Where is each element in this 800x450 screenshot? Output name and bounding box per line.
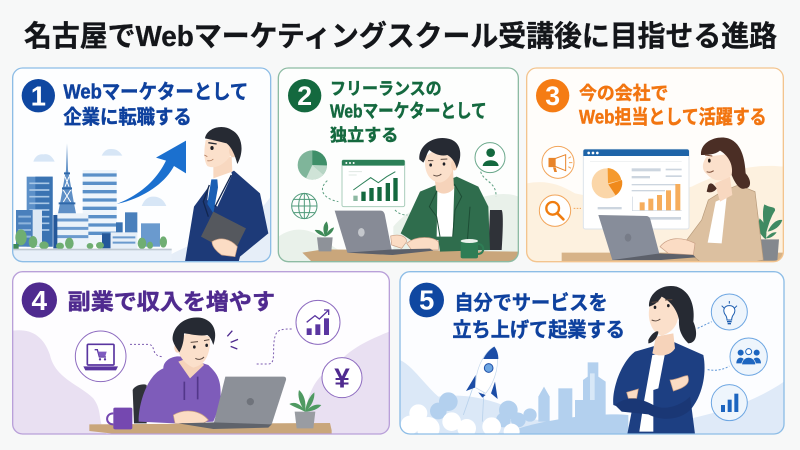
icon: people	[730, 338, 767, 375]
panel 5: start a business	[400, 272, 784, 440]
number badge 5	[409, 283, 444, 317]
icon: rising arrow	[117, 141, 186, 204]
icon: rocket	[463, 347, 498, 422]
number badge 4	[22, 282, 57, 318]
panel 3 heading	[579, 82, 767, 128]
panel 2 heading: Webマーケターとして	[330, 101, 487, 122]
panel 3: in-house web role	[527, 68, 783, 262]
mug	[461, 239, 483, 258]
icon: user bubble	[475, 143, 505, 173]
icon: potted plant	[315, 221, 334, 251]
laptop	[335, 211, 433, 255]
panel 4: side business	[13, 272, 389, 434]
icon: globe	[292, 193, 317, 219]
mug	[107, 408, 132, 429]
illustration: man in purple hoodie	[133, 317, 221, 423]
panel 2 heading: 独立する	[330, 125, 398, 145]
icon: megaphone bubble	[542, 146, 574, 178]
icon: yen coin: ¥	[334, 363, 350, 394]
laptop	[178, 377, 286, 429]
number badge 5: 5	[419, 285, 434, 316]
skyline	[519, 362, 628, 434]
icon: pie chart	[298, 150, 327, 180]
panel 2 heading: フリーランスの	[330, 78, 442, 98]
number badge 3	[536, 79, 569, 112]
panel 2 heading	[330, 78, 487, 145]
icon: shopping laptop	[75, 331, 126, 382]
trees	[15, 229, 167, 249]
panel 3 heading: 今の会社で	[579, 82, 668, 103]
number badge 2	[288, 79, 321, 112]
number badge 1	[22, 79, 55, 112]
number badge 1: 1	[31, 80, 46, 111]
desk	[89, 423, 332, 434]
icon: yen coin	[322, 358, 362, 398]
icon: growth chart	[296, 300, 340, 344]
panel 5 heading: 立ち上げて起業する	[452, 318, 625, 341]
panel 3 heading: Web担当として活躍する	[579, 105, 767, 128]
panel 1: career change	[13, 68, 271, 262]
panel 5 heading	[452, 291, 625, 341]
panel 4 heading: 副業で収入を増やす	[68, 289, 275, 314]
illustration: businessman with tablet	[185, 127, 268, 262]
illustration: businesswoman with folded arms	[613, 286, 705, 434]
icon: potted plant	[758, 204, 782, 261]
icon: magnifier	[539, 195, 581, 226]
panel 1 heading	[63, 81, 248, 128]
number badge 2: 2	[297, 81, 312, 111]
panel 2: freelance	[278, 68, 518, 262]
title: 名古屋でWebマーケティングスクール受講後に目指せる進路	[24, 20, 777, 53]
panel 5 heading: 自分でサービスを	[454, 291, 608, 314]
dashboard window	[342, 160, 405, 207]
laptop	[598, 215, 696, 260]
icon: potted plant	[289, 390, 321, 428]
icon: light bulb	[711, 294, 747, 330]
dashboard window	[583, 149, 689, 229]
burst marks	[227, 331, 238, 349]
panel 1 heading: 企業に転職する	[63, 106, 192, 128]
number badge 3: 3	[545, 81, 560, 111]
illustration: man with green jacket	[391, 138, 503, 252]
dashed connectors	[322, 172, 496, 215]
desk	[302, 249, 518, 262]
dashed connectors	[130, 329, 292, 364]
illustration: city skyline	[13, 143, 172, 250]
illustration: woman in beige jacket	[660, 137, 763, 262]
dashed connectors	[698, 322, 729, 370]
panel 1 heading: Webマーケターとして	[63, 81, 248, 104]
clouds	[430, 392, 537, 427]
number badge 4: 4	[32, 285, 48, 316]
icon: bar chart	[711, 385, 747, 421]
